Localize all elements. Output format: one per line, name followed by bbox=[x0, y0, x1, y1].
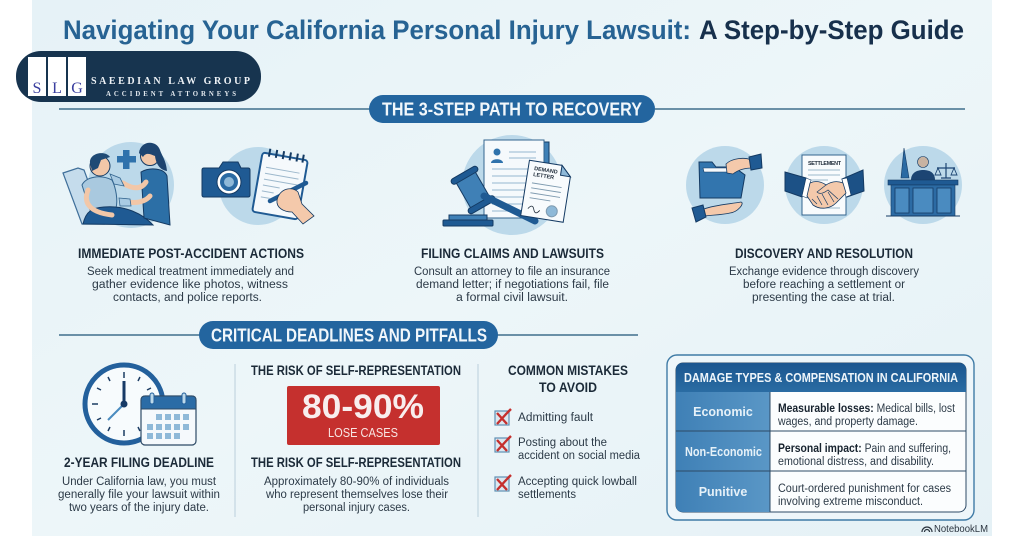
heading and text: self-representation explanation: who represent themselves lose their bbox=[265, 489, 448, 501]
heading: the risk of self-representation: THE RISK OF SELF-REPRESENTATION bbox=[251, 363, 461, 378]
row: non-economic bbox=[778, 443, 951, 468]
panel: common mistakes to avoid: TO AVOID bbox=[539, 380, 597, 395]
heading and text: immediate post-accident actions bbox=[78, 246, 304, 304]
text: posting about the accident: Posting about the bbox=[518, 437, 607, 449]
title: A Step-by-Step Guide bbox=[699, 15, 964, 45]
logo: Saeedian Law Group: SAEEDIAN LAW GROUP bbox=[91, 76, 250, 87]
heading and text: self-representation explanation: Approximately 80-90% of individuals bbox=[264, 476, 449, 488]
icon: gavel, document and demand letter bbox=[443, 135, 572, 235]
heading and text: 2-year filing deadline: Under California law, you must bbox=[62, 476, 217, 488]
heading and text: immediate post-accident actions: Seek medical treatment immediately and bbox=[87, 266, 294, 278]
panel: common mistakes to avoid: COMMON MISTAKES bbox=[508, 363, 628, 378]
icon: patient receiving medical care bbox=[63, 142, 174, 228]
logo: Saeedian Law Group: L bbox=[52, 80, 62, 97]
heading and text: discovery and resolution: before reaching a settlement or bbox=[743, 279, 905, 291]
table header bbox=[676, 363, 966, 392]
section header: critical deadlines and pitfalls bbox=[59, 321, 638, 349]
heading and text: 2-year filing deadline: 2-YEAR FILING DEADLINE bbox=[64, 455, 214, 470]
text: admitting fault: Admitting fault bbox=[518, 412, 594, 424]
row: non-economic: emotional distress, and disability. bbox=[778, 456, 934, 468]
heading and text: 2-year filing deadline bbox=[58, 455, 220, 514]
row: economic: Measurable losses: Medical bills, lost bbox=[778, 403, 956, 415]
row labels column: Non-Economic bbox=[685, 445, 762, 459]
heading and text: immediate post-accident actions: IMMEDIATE POST-ACCIDENT ACTIONS bbox=[78, 246, 304, 261]
row labels column: Economic bbox=[693, 405, 753, 419]
callout: 80-90% lose cases: LOSE CASES bbox=[328, 425, 398, 440]
logo: Saeedian Law Group: G bbox=[71, 80, 83, 97]
heading and text: 2-year filing deadline: two years of the injury date. bbox=[69, 502, 209, 514]
icon: courtroom judge bench bbox=[884, 146, 962, 224]
panel: common mistakes to avoid bbox=[495, 363, 641, 501]
heading and text: filing claims and lawsuits: demand letter; if negotiations fail, file bbox=[416, 279, 609, 291]
heading and text: filing claims and lawsuits: a formal civil lawsuit. bbox=[456, 292, 568, 304]
heading and text: 2-year filing deadline: generally file your lawsuit within bbox=[58, 489, 220, 501]
heading and text: self-representation explanation bbox=[251, 455, 461, 514]
row: economic bbox=[777, 403, 956, 428]
callout: 80-90% lose cases: 80-90% bbox=[302, 388, 424, 426]
text: accepting lowball settlements: settlements bbox=[518, 489, 576, 501]
heading and text: filing claims and lawsuits: FILING CLAIMS AND LAWSUITS bbox=[421, 246, 604, 261]
row: economic: wages, and property damage. bbox=[777, 416, 918, 428]
text: posting about the accident bbox=[518, 437, 641, 462]
callout: 80-90% lose cases bbox=[287, 386, 440, 445]
icon: folder exchanged between hands bbox=[686, 146, 764, 224]
title: Navigating Your California Personal Injury Lawsuit: bbox=[63, 15, 691, 45]
text: posting about the accident: accident on social media bbox=[518, 450, 641, 462]
text: accepting lowball settlements: Accepting quick lowball bbox=[518, 476, 637, 488]
row: punitive: Court-ordered punishment for cases bbox=[778, 483, 951, 495]
heading and text: self-representation explanation: personal injury cases. bbox=[303, 502, 410, 514]
heading and text: immediate post-accident actions: gather evidence like photos, witness bbox=[92, 279, 288, 291]
icon: x checkbox bbox=[495, 436, 511, 452]
logo: Saeedian Law Group: ACCIDENT ATTORNEYS bbox=[106, 91, 236, 98]
row: punitive: involving extreme misconduct. bbox=[778, 496, 923, 508]
heading and text: discovery and resolution: presenting the case at trial. bbox=[752, 292, 895, 304]
section header: the 3-step path bbox=[59, 95, 965, 123]
icon: gavel, document and demand letter: LETTER bbox=[533, 172, 554, 181]
text: accepting lowball settlements bbox=[518, 476, 637, 501]
icon: x checkbox bbox=[495, 409, 511, 425]
row labels column bbox=[676, 392, 770, 512]
section header: the 3-step path: THE 3-STEP PATH TO RECOVERY bbox=[382, 100, 642, 120]
panel: damage types and compensation table bbox=[667, 355, 974, 520]
icon: clock and calendar bbox=[85, 365, 196, 445]
heading and text: self-representation explanation: THE RISK OF SELF-REPRESENTATION bbox=[251, 455, 461, 470]
row labels column: Punitive bbox=[699, 485, 747, 499]
icon: settlement handshake bbox=[785, 146, 864, 224]
heading and text: filing claims and lawsuits: Consult an attorney to file an insurance bbox=[414, 266, 610, 278]
logo: Saeedian Law Group: S bbox=[33, 80, 41, 97]
logo: Saeedian Law Group bbox=[16, 51, 261, 102]
heading and text: filing claims and lawsuits bbox=[414, 246, 610, 304]
icon: camera and notepad with pen bbox=[202, 147, 314, 225]
icon: gavel, document and demand letter: DEMAND bbox=[534, 166, 558, 176]
table header: DAMAGE TYPES & COMPENSATION IN CALIFORNIA bbox=[684, 370, 959, 385]
section header: critical deadlines and pitfalls: CRITICAL DEADLINES AND PITFALLS bbox=[211, 326, 487, 346]
notebooklm watermark: NotebookLM bbox=[934, 524, 988, 535]
icon: settlement handshake: SETTLEMENT bbox=[808, 161, 842, 167]
row: non-economic: Personal impact: Pain and suffering, bbox=[778, 443, 951, 455]
heading and text: discovery and resolution: DISCOVERY AND RESOLUTION bbox=[735, 246, 913, 261]
heading and text: discovery and resolution bbox=[729, 246, 919, 304]
heading and text: immediate post-accident actions: contacts, and police reports. bbox=[113, 292, 262, 304]
icon: x checkbox bbox=[495, 475, 511, 491]
row: punitive bbox=[778, 483, 951, 508]
heading and text: discovery and resolution: Exchange evidence through discovery bbox=[729, 266, 919, 278]
